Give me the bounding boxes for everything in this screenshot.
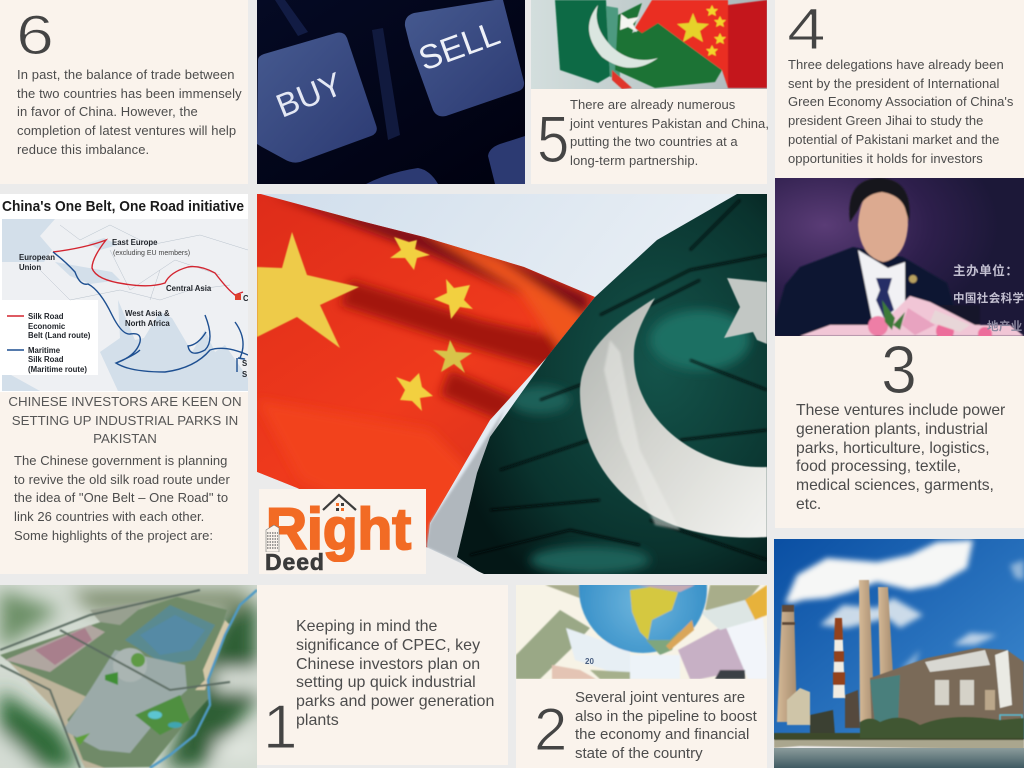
text: silk route plan — [14, 453, 230, 543]
text: point 5 — [570, 97, 769, 168]
text: point 1: setting up quick industrial — [296, 674, 476, 691]
text: point 2: the economy and financial — [575, 726, 749, 743]
text: point 4: Three delegations have already been — [788, 57, 1004, 72]
flag stars — [257, 232, 473, 411]
text: point 3: parks, horticulture, logistics, — [796, 440, 990, 456]
text: silk route plan: The Chinese government is planning — [14, 453, 227, 468]
text: point 4 — [788, 57, 1013, 166]
text: point 1 — [296, 618, 494, 729]
text: point 1: plants — [296, 712, 339, 729]
Pakistan flag — [457, 194, 767, 574]
river — [150, 590, 257, 768]
map labels: Economic — [28, 322, 66, 331]
backdrop Chinese text — [953, 263, 1024, 333]
text: point 1: Keeping in mind the — [296, 618, 437, 635]
map labels: European — [19, 253, 55, 262]
roads — [0, 590, 230, 768]
panel: point 1 — [257, 585, 508, 765]
number 5: 5 — [537, 102, 569, 176]
map card: (excluding EU members) — [113, 250, 190, 257]
panel heading: SETTING UP INDUSTRIAL PARKS IN — [12, 413, 238, 428]
text: point 4: president Green Jihai to study the — [788, 113, 983, 128]
text: point 4: sent by the president of International — [788, 76, 999, 91]
backdrop Chinese text: 地产业 — [987, 319, 1023, 333]
backdrop Chinese text: 中国社会科学 — [953, 291, 1024, 305]
text: point 3: etc. — [796, 496, 821, 513]
text: silk route plan: Some highlights of the project are: — [14, 528, 213, 543]
panel: point 4 — [775, 0, 1024, 178]
text: point 5: joint ventures Pakistan and China, — [570, 116, 769, 131]
map labels: Central Asia — [166, 284, 212, 293]
key: sell — [405, 0, 524, 116]
panel: point 2 — [516, 679, 767, 768]
image: speaker at podium — [775, 178, 1024, 336]
crescent star — [724, 278, 767, 344]
text: silk route plan: the idea of "One Belt – One Road" to — [14, 490, 228, 505]
text: point 1: Chinese investors plan on — [296, 656, 480, 673]
hub — [63, 650, 187, 753]
text: point 3: generation plants, industrial — [796, 421, 988, 438]
map labels: (Maritime route) — [28, 365, 87, 374]
China flag — [257, 193, 595, 560]
text: silk route plan: link 26 countries with each other. — [14, 509, 204, 524]
industrial plant — [870, 648, 1024, 735]
map labels: East Europe — [112, 238, 158, 247]
panel: point 5 — [531, 89, 767, 184]
icon: house roof — [322, 494, 357, 511]
panel: one belt one road map — [0, 194, 248, 574]
text: point 6: completion of latest ventures will help — [17, 123, 236, 138]
image: handshake with flags — [531, 0, 767, 89]
icon: building — [266, 525, 280, 552]
number 1: 1 — [263, 693, 297, 762]
text: point 3: food processing, textile, — [796, 458, 961, 475]
image: globe on banknotes: 20 — [585, 657, 594, 666]
key: sell: SELL — [414, 14, 505, 79]
text: point 4: opportunities it holds for investors — [788, 151, 983, 166]
residential blocks — [5, 625, 105, 672]
text: point 5: long-term partnership. — [570, 153, 698, 168]
panel heading — [8, 394, 242, 446]
crescent — [580, 298, 767, 538]
key: buy — [257, 33, 377, 163]
map labels: Silk Road — [28, 312, 64, 321]
text: point 6: In past, the balance of trade between — [17, 67, 235, 82]
text: point 6: the two countries has been immensely — [17, 86, 242, 101]
text: point 1: parks and power generation — [296, 693, 494, 710]
backdrop Chinese text: 主办单位： — [953, 263, 1019, 278]
image: globe on banknotes — [516, 585, 767, 679]
map labels: S — [242, 359, 247, 368]
map card — [0, 194, 248, 392]
logo word Right: Right — [266, 497, 411, 562]
tan land and roads — [0, 597, 227, 768]
image: power plant with smoke stacks — [774, 539, 1024, 768]
map labels: West Asia & — [125, 309, 170, 318]
logo: Right Deed — [259, 489, 426, 574]
text: point 6 — [17, 67, 242, 157]
panel: point 3 — [775, 336, 1024, 528]
image: aerial view of industrial park — [0, 585, 257, 768]
stacks — [777, 605, 797, 722]
text: point 3: These ventures include power — [796, 402, 1005, 419]
key: buy: BUY — [271, 65, 348, 124]
map labels: S — [242, 370, 247, 379]
maritime silk road — [53, 252, 248, 372]
silk road land route — [53, 240, 243, 295]
image: buy and sell keyboard keys — [257, 0, 525, 184]
text: point 4: potential of Pakistani market and the — [788, 132, 999, 147]
panel heading: PAKISTAN — [93, 431, 157, 446]
text: point 4: Green Economy Association of China's — [788, 94, 1013, 109]
text: point 2: state of the country — [575, 745, 703, 762]
text: point 2: Several joint ventures are — [575, 689, 745, 706]
text: point 5: putting the two countries at a — [570, 134, 738, 149]
text: point 6: reduce this imbalance. — [17, 142, 149, 157]
panel heading: CHINESE INVESTORS ARE KEEN ON — [8, 394, 242, 409]
map labels: Silk Road — [28, 355, 64, 364]
map labels — [19, 238, 249, 379]
text: point 2: also in the pipeline to boost — [575, 708, 757, 725]
map labels: Belt (Land route) — [28, 331, 91, 340]
text: point 5: There are already numerous — [570, 97, 735, 112]
number 6: 6 — [16, 3, 54, 66]
text: point 1: significance of CPEC, key — [296, 637, 480, 654]
text: point 3: medical sciences, garments, — [796, 477, 994, 494]
map labels: Maritime — [28, 346, 61, 355]
map base — [2, 219, 248, 391]
flowers — [800, 296, 1024, 341]
number 2: 2 — [534, 696, 567, 763]
text: silk route plan: to revive the old silk road route under — [14, 472, 230, 487]
text: point 2 — [575, 689, 757, 762]
map labels: Union — [19, 263, 41, 272]
map labels: North Africa — [125, 319, 170, 328]
text: point 3 — [796, 402, 1005, 513]
smoke — [785, 540, 1024, 670]
panel: point 6 — [0, 0, 248, 184]
image: China and Pakistan flags — [257, 194, 767, 574]
trees — [774, 733, 1024, 740]
shore — [774, 740, 1024, 750]
flag white hoist band — [426, 410, 504, 574]
text: point 6: in favor of China. However, the — [17, 104, 198, 119]
